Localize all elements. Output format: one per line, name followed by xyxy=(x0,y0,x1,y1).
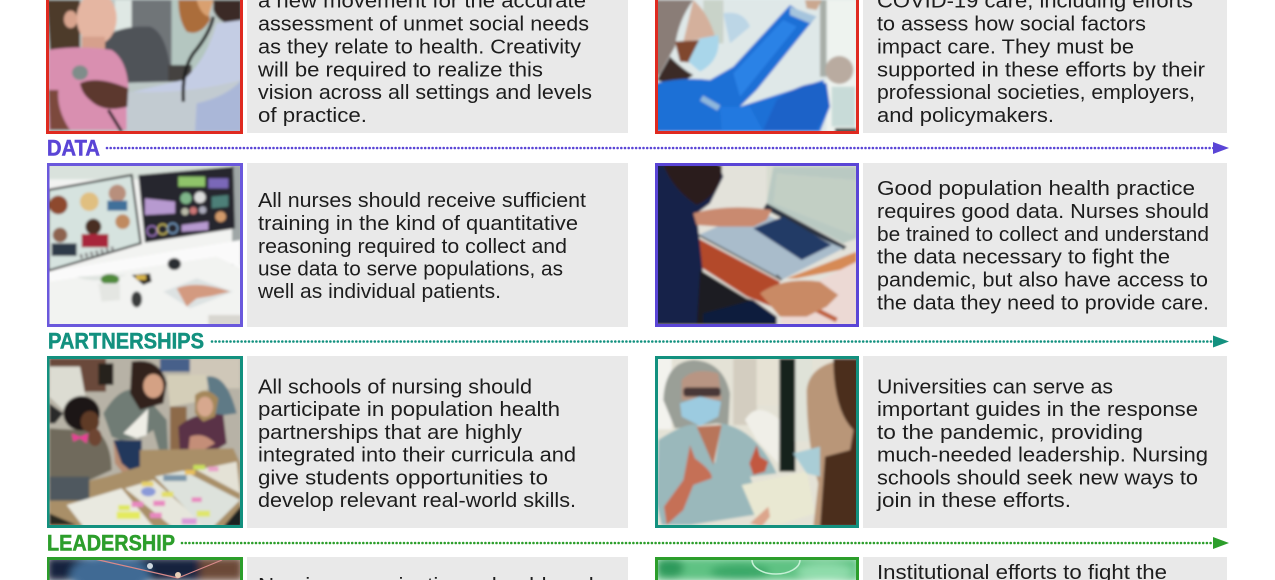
text: data right: requires good data. Nurses should xyxy=(877,200,1209,223)
text: social needs left: vision across all settings and levels xyxy=(258,81,592,104)
text: partnerships left: partnerships that are highly xyxy=(258,421,523,444)
text: social needs left: of practice. xyxy=(258,104,367,127)
text: partnerships left: integrated into their curricula and xyxy=(258,444,576,466)
photo: masked woman talking xyxy=(655,356,858,527)
photo: nurse in blue gown xyxy=(653,0,862,135)
text: social needs right: impact care. They must be xyxy=(877,36,1134,58)
text: social needs right: to assess how social factors xyxy=(877,13,1146,36)
photo: colleagues around a table of papers xyxy=(47,356,242,527)
text: social needs right: professional societies, employers, xyxy=(877,81,1195,104)
text: partnerships right xyxy=(876,375,1208,512)
text: partnerships right: to the pandemic, providing xyxy=(877,421,1143,444)
text: partnerships left xyxy=(258,375,576,512)
text: social needs right: and policymakers. xyxy=(877,104,1054,127)
text: data left: well as individual patients. xyxy=(257,280,501,303)
photo: person typing on a laptop xyxy=(655,163,859,326)
heading: DATA with dotted arrow: DATA xyxy=(47,136,100,160)
text: social needs left: assessment of unmet social needs xyxy=(258,13,589,36)
text: data right: be trained to collect and understand xyxy=(877,223,1209,246)
panel: partnerships row, right card xyxy=(655,356,1227,528)
text: data left xyxy=(257,189,586,303)
text: social needs right xyxy=(877,0,1205,127)
text: partnerships left: All schools of nursing should xyxy=(258,375,532,398)
text: partnerships left: participate in population health xyxy=(258,398,560,421)
text: data right: the data they need to provide care. xyxy=(877,292,1209,314)
panel: leadership row, right card xyxy=(655,557,1227,580)
text: partnerships left: develop relevant real-world skills. xyxy=(258,489,576,512)
heading: PARTNERSHIPS with dotted arrow: PARTNERSHIPS xyxy=(48,329,204,354)
text: data right: the data necessary to fight the xyxy=(877,246,1170,268)
text: data right xyxy=(877,177,1209,314)
text: partnerships right: join in these efforts. xyxy=(876,489,1071,512)
photo: glowing network over a dark globe xyxy=(47,555,243,580)
panel: data row, left card xyxy=(47,163,628,327)
panel: social needs row, right card xyxy=(653,0,1227,135)
panel: leadership row, left card xyxy=(47,555,628,580)
text: data right: pandemic, but also have access to xyxy=(877,268,1208,292)
text: partnerships right: much-needed leadership. Nursing xyxy=(877,444,1208,466)
text: data left: training in the kind of quantitative xyxy=(258,212,578,235)
text: partnerships left: give students opportunities to xyxy=(258,466,548,490)
photo: video call and dashboard screens xyxy=(47,163,243,326)
photo: green network image xyxy=(655,557,859,580)
heading: PARTNERSHIPS with dotted arrow xyxy=(48,329,1229,354)
panel: partnerships row, left card xyxy=(47,356,628,528)
photo: child with stethoscope xyxy=(45,0,245,135)
text: partnerships right: Universities can serve as xyxy=(877,375,1113,398)
text: social needs left xyxy=(257,0,592,127)
heading: LEADERSHIP with dotted arrow xyxy=(47,530,1229,556)
text: partnerships right: schools should seek new ways to xyxy=(877,466,1198,490)
heading: DATA with dotted arrow xyxy=(47,136,1229,160)
heading: LEADERSHIP with dotted arrow: LEADERSHIP xyxy=(47,530,175,556)
text: data right: Good population health practice xyxy=(877,177,1195,200)
panel: data row, right card xyxy=(655,163,1227,327)
text: partnerships right: important guides in the response xyxy=(877,398,1198,421)
panel: social needs row, left card xyxy=(45,0,628,135)
text: social needs left: as they relate to health. Creativity xyxy=(258,36,582,58)
text: data left: reasoning required to collect and xyxy=(258,235,567,258)
text: social needs left: will be required to realize this xyxy=(257,58,543,82)
text: social needs right: supported in these efforts by their xyxy=(877,58,1205,82)
text: data left: use data to serve populations, as xyxy=(258,258,563,280)
text: data left: All nurses should receive sufficient xyxy=(258,189,586,212)
